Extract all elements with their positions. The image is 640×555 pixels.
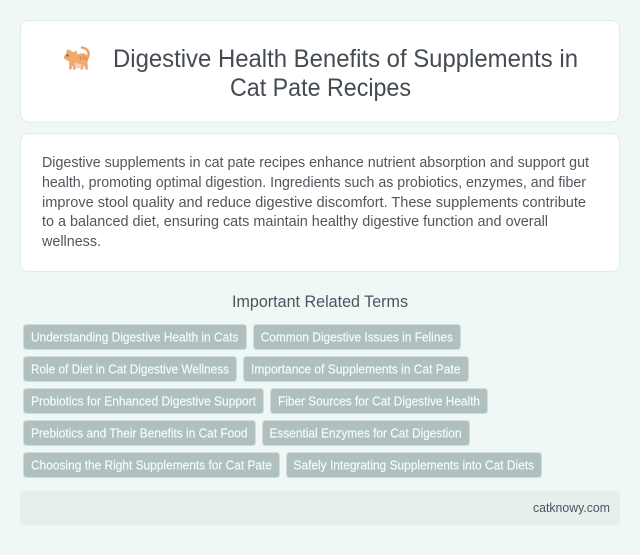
- tag: Probiotics for Enhanced Digestive Support: [31, 394, 256, 408]
- tag: [262, 420, 470, 446]
- tag: Safely Integrating Supplements into Cat Diets: [294, 458, 534, 472]
- tag: [286, 452, 542, 478]
- title: Cat Pate Recipes: [230, 74, 411, 102]
- panel: title card: [20, 20, 620, 122]
- tag: [254, 324, 460, 350]
- tag list: [24, 324, 542, 478]
- tag: Prebiotics and Their Benefits in Cat Food: [31, 426, 248, 440]
- tag: [24, 452, 280, 478]
- tag: [244, 356, 468, 382]
- description text: wellness.: [41, 234, 101, 250]
- tag: Common Digestive Issues in Felines: [261, 330, 453, 344]
- tag: [24, 356, 236, 382]
- footer: [20, 491, 620, 525]
- tag: Understanding Digestive Health in Cats: [31, 330, 239, 344]
- tag: Fiber Sources for Cat Digestive Health: [278, 394, 480, 408]
- panel: description card: [20, 134, 620, 272]
- description text: [41, 155, 589, 250]
- tag: Role of Diet in Cat Digestive Wellness: [31, 362, 229, 376]
- title: [113, 45, 578, 102]
- tag: [24, 388, 264, 414]
- footer site name: catknowy.com: [533, 500, 610, 515]
- heading: important related terms: Important Related Terms: [232, 293, 408, 311]
- icon: orange cat: [64, 48, 89, 70]
- description text: Digestive supplements in cat pate recipes enhance nutrient absorption and support gut: [42, 155, 589, 171]
- description text: improve stool quality and reduce digestive discomfort. These supplements contribute: [42, 195, 586, 211]
- description text: health, promoting optimal digestion. Ingredients such as probiotics, enzymes, and fiber: [42, 175, 586, 191]
- tag: Choosing the Right Supplements for Cat Pate: [31, 458, 272, 472]
- tag: [270, 388, 488, 414]
- tag: Importance of Supplements in Cat Pate: [251, 362, 460, 376]
- tag: Essential Enzymes for Cat Digestion: [270, 426, 462, 440]
- title: Digestive Health Benefits of Supplements in: [113, 45, 578, 73]
- tag: [24, 324, 246, 350]
- tag: [24, 420, 256, 446]
- description text: to a balanced diet, ensuring cats maintain healthy digestive function and overall: [42, 214, 548, 230]
